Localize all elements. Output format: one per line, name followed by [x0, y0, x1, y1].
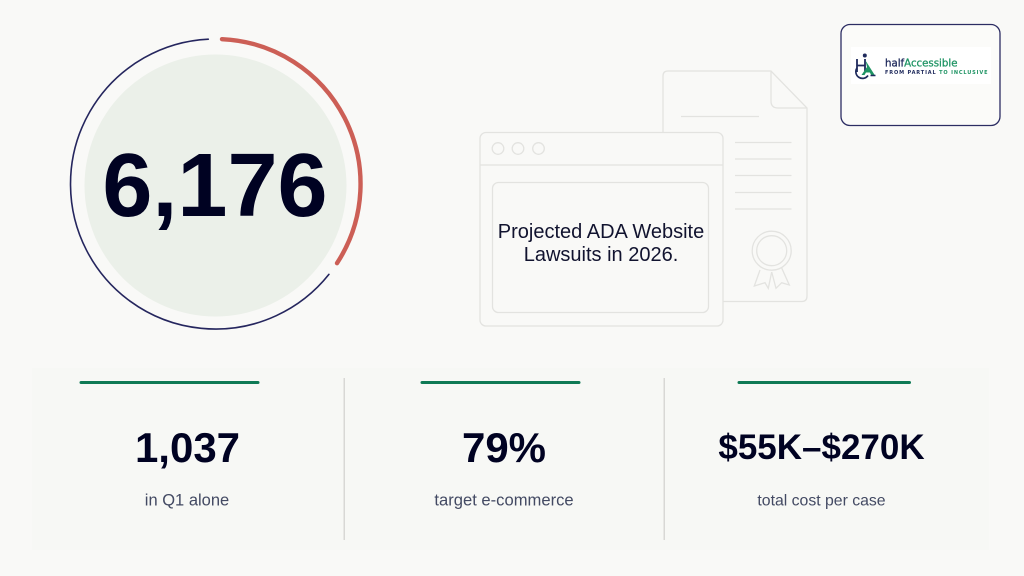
icon: certificate document [663, 71, 807, 302]
logo card [841, 24, 1000, 126]
stat: in Q1 alone [80, 381, 260, 510]
stat: target e-commerce: target e-commerce [434, 490, 574, 510]
icon: seal [752, 231, 791, 288]
stat: total cost per case: total cost per case [757, 492, 886, 510]
stat: total cost per case [718, 381, 925, 510]
hero number: 6,176 [102, 136, 328, 236]
logo tagline: FROM PARTIAL TO INCLUSIVE [885, 70, 988, 76]
ring: navy arc [71, 39, 329, 329]
illustration: document and browser window [480, 71, 807, 326]
caption: Projected ADA Website [498, 221, 704, 243]
stat: total cost per case: $55K–$270K [718, 428, 925, 467]
stats panel [32, 368, 989, 550]
browser window [480, 132, 723, 326]
inner circle [84, 54, 346, 316]
stat: target e-commerce: 79% [462, 424, 546, 471]
stat: in Q1 alone: 1,037 [135, 424, 240, 471]
hero stat: 6,176 ring [71, 39, 361, 329]
stat: in Q1 alone: in Q1 alone [145, 492, 229, 510]
ring: red arc [222, 39, 361, 263]
caption: Lawsuits in 2026. [524, 244, 678, 266]
stat: target e-commerce [420, 381, 580, 510]
logo wordmark: halfAccessible [885, 56, 958, 69]
icon: logo mark [856, 54, 876, 78]
